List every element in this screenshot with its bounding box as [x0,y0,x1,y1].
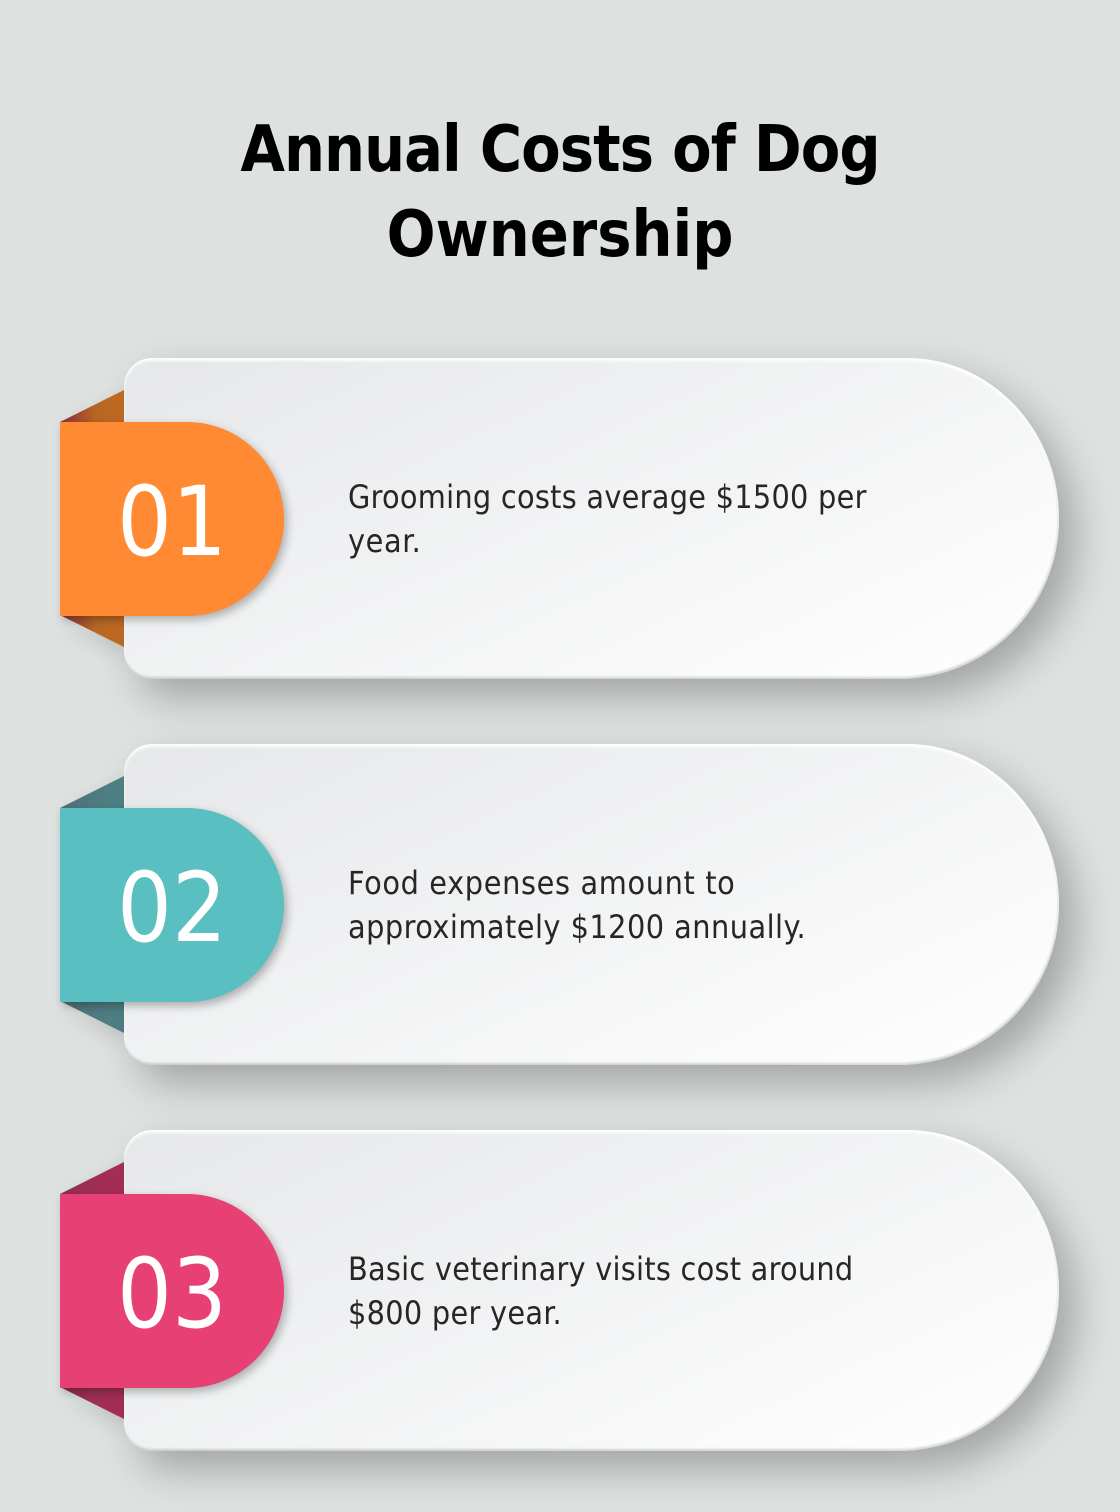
text: grooming [348,478,867,560]
text: food [348,864,806,946]
number badge 01: 01 [117,466,227,578]
ribbon folds [60,776,124,1040]
card background [124,1130,1059,1451]
panel: grooming costs [58,356,1094,718]
panel: food expenses [58,742,1094,1104]
card background [124,358,1059,679]
title: Ownership [387,198,733,272]
ribbon folds [60,390,124,654]
text: food: approximately $1200 annually. [348,908,806,946]
number badge 01 [60,422,284,616]
text: grooming: year. [348,522,421,560]
text: veterinary [348,1250,853,1332]
text: food: Food expenses amount to [348,864,735,902]
title: Annual Costs of Dog [240,113,880,187]
text: veterinary: $800 per year. [348,1294,562,1332]
panel: veterinary visits [58,1128,1094,1490]
title [240,113,880,272]
number badge 02 [60,808,284,1002]
card background [124,744,1059,1065]
number badge 03 [60,1194,284,1388]
text: grooming: Grooming costs average $1500 per [348,478,867,516]
number badge 03: 03 [117,1238,227,1350]
text: veterinary: Basic veterinary visits cost around [348,1250,853,1288]
number badge 02: 02 [117,852,227,964]
ribbon folds [60,1162,124,1426]
